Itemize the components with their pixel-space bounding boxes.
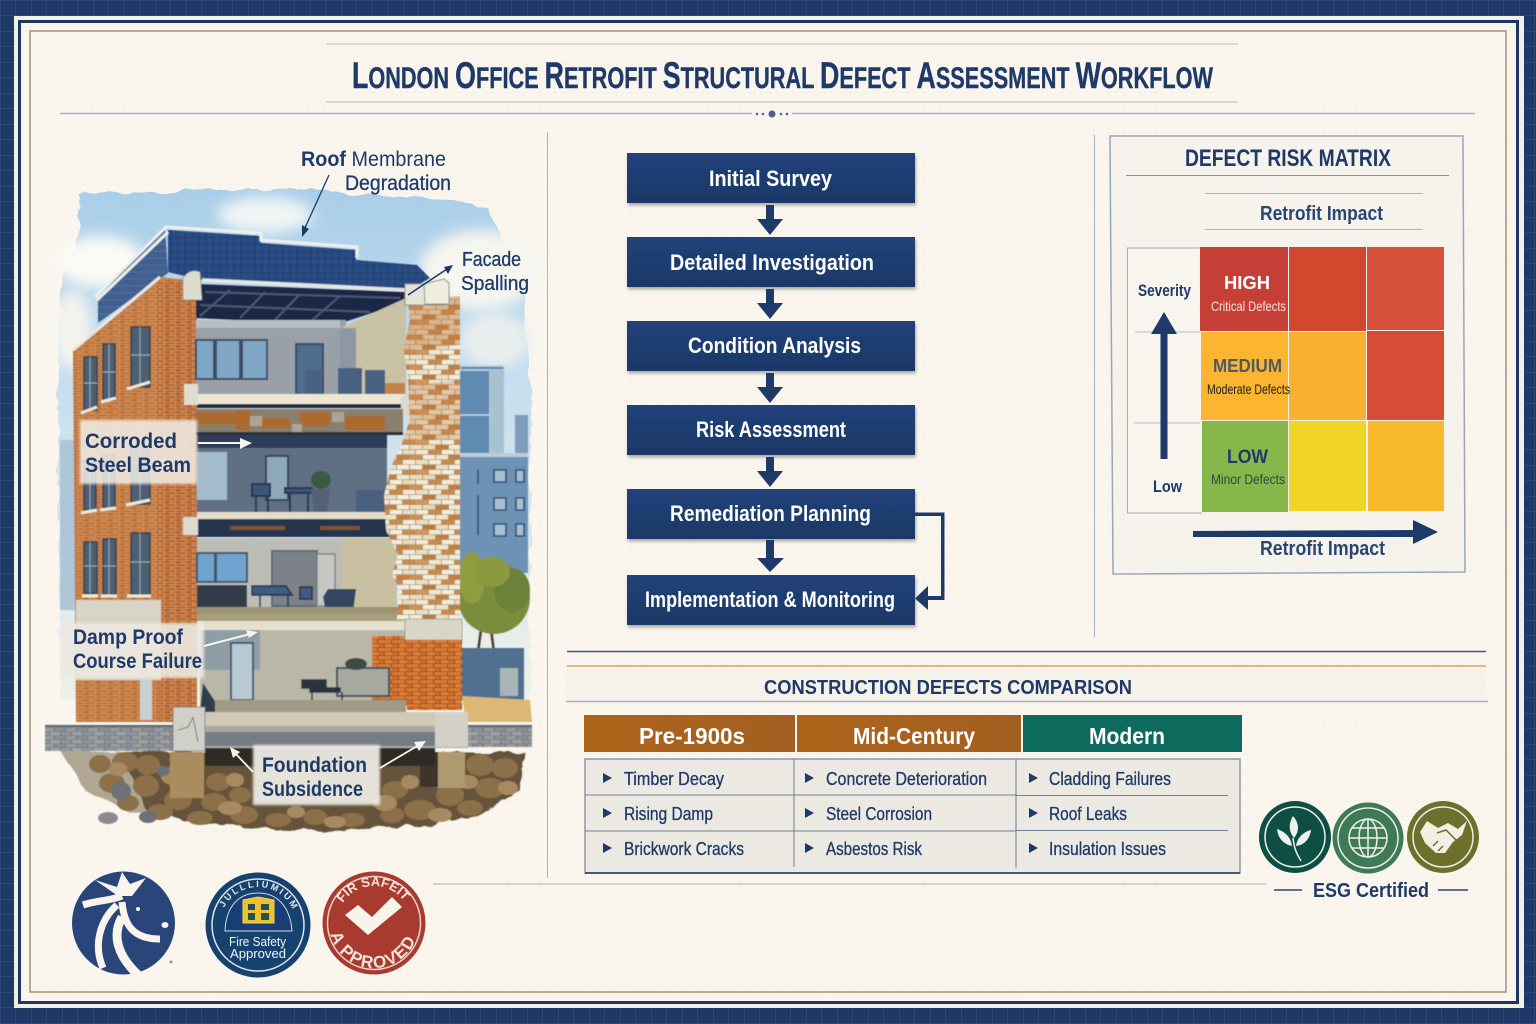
title: LONDON OFFICE RETROFIT STRUCTURAL DEFECT ASSESSMENT WORKFLOW [352,55,1213,96]
callout: facade spalling: Facade [462,249,521,271]
step: risk assessment: Risk Assessment [696,417,847,442]
floor 4 interior [200,630,408,712]
header row: Modern [1089,723,1165,749]
callout: roof membrane degradation: Degradation [345,172,451,195]
icon: fire safety approved stamp [322,872,426,974]
step: initial survey [627,153,915,203]
footer rule [433,883,1266,885]
cell text: medium [1207,356,1290,397]
step: detailed investigation [627,237,915,287]
pale plinth [76,600,161,680]
severity arrow [1151,312,1177,459]
callout: damp proof course failure: Damp Proof [73,626,184,649]
step: remediation planning [627,489,915,539]
callout: damp proof course failure [62,623,258,678]
soil and foundations rubble [62,748,525,830]
step: risk assessment [627,405,915,455]
modern items: Roof Leaks [1049,804,1127,824]
corner pier [158,281,197,722]
column dividers [548,132,1094,878]
severity label: Severity [1138,281,1191,300]
corroded beam [195,409,403,435]
callout: foundation subsidence: Subsidence [262,778,363,801]
bottom axis label: Retrofit Impact [1260,538,1385,560]
step: condition analysis [627,321,915,371]
background towers [60,366,528,610]
pre-1900s items [624,769,744,859]
panel: construction defects comparison [566,652,1488,873]
risk grid [1200,247,1444,512]
modern items: Insulation Issues [1049,839,1166,859]
matrix title: DEFECT RISK MATRIX [1185,145,1391,172]
step: condition analysis: Condition Analysis [688,333,861,358]
tree [458,552,530,652]
step: detailed investigation: Detailed Investigation [670,250,874,275]
callout: roof membrane degradation [301,148,451,237]
callout: damp proof course failure: Course Failure [73,650,202,673]
panel: workflow [627,153,944,625]
window icon [243,897,274,923]
section heading: CONSTRUCTION DEFECTS COMPARISON [764,677,1132,699]
header row [584,715,1242,752]
mid-century items: Steel Corrosion [826,804,932,824]
callout: foundation subsidence: Foundation [262,754,367,777]
low label: Low [1153,477,1183,496]
cell text: low: Minor Defects [1211,471,1285,487]
pre-1900s items: Timber Decay [624,769,724,789]
step: remediation planning: Remediation Planning [670,501,871,526]
step: initial survey: Initial Survey [709,166,833,191]
sky background [52,190,540,700]
roof shingles [168,230,430,291]
callout: corroded steel beam: Corroded [85,430,177,453]
icon: fire safety badge: Approved [230,947,286,961]
mid-century items: Asbestos Risk [826,839,923,859]
icon: fire safety badge [206,872,310,978]
feedback connector arrow [915,512,944,610]
floor 2 interior [183,435,395,537]
panel: building cutaway illustration [45,148,540,830]
severity axis box [1128,248,1202,513]
horizontal impact arrow [1193,520,1438,544]
step: implementation and monitoring [627,575,915,625]
callout: corroded steel beam: Steel Beam [85,454,191,477]
cell text: low [1211,447,1285,487]
slab and foundation [173,707,468,751]
icon: esg handshake badge [1407,801,1479,873]
header row: Pre-1900s [639,723,745,749]
icon: lion emblem [72,872,175,975]
pre-1900s items: Brickwork Cracks [624,839,744,859]
cell text: high: Critical Defects [1211,298,1286,314]
icon: esg globe badge [1332,802,1404,874]
callout: roof membrane degradation: Roof Membrane [301,148,446,171]
ceiling trusses [196,280,407,325]
pre-1900s items: Rising Damp [624,804,713,824]
arrow [757,540,784,572]
icon: fire safety badge: Fire Safety [229,935,287,949]
mid-century items [826,769,987,859]
arrow [757,289,783,319]
ground strips [45,725,532,751]
step: implementation and monitoring: Implementation & Monitoring [645,587,895,612]
roof parapet [95,227,357,300]
facade windows [84,327,150,595]
mid-century items: Concrete Deterioration [826,769,987,789]
esg certified label: ESG Certified [1313,880,1429,902]
street-level building and pavement [462,648,532,722]
icon: fire safety badge: JULLLIUMIUM [220,880,298,909]
cell text: high: HIGH [1224,273,1270,293]
cell text: low: LOW [1227,447,1268,468]
arrow [757,205,783,235]
floor 1 interior [184,298,414,416]
icon: fire safety approved stamp: A PPROVED [330,934,414,968]
table body [585,759,1240,873]
roof side siding [98,228,168,323]
cell text: high [1211,273,1286,314]
cell text: medium: MEDIUM [1213,356,1282,376]
title block [326,44,1238,102]
modern items: Cladding Failures [1049,769,1171,789]
arrow [757,373,783,403]
callout: facade spalling [408,249,529,295]
right pier damaged brick [384,279,462,710]
arrow [757,457,783,487]
panel: defect risk matrix [1110,136,1465,574]
icon: fire safety approved stamp: FIR SAFEIT [336,877,410,902]
floor 3 interior [197,538,405,629]
title divider with ornament [60,110,1475,118]
header row: Mid-Century [853,723,975,749]
cell text: medium: Moderate Defects [1207,381,1290,397]
upper corner cap [183,271,202,300]
icon: esg leaf badge [1259,801,1331,873]
modern items [1049,769,1171,859]
top axis label: Retrofit Impact [1260,203,1383,225]
callout: facade spalling: Spalling [461,273,529,295]
callout: corroded steel beam [80,420,252,484]
left brick facade [73,277,197,722]
callout: foundation subsidence [230,741,426,805]
